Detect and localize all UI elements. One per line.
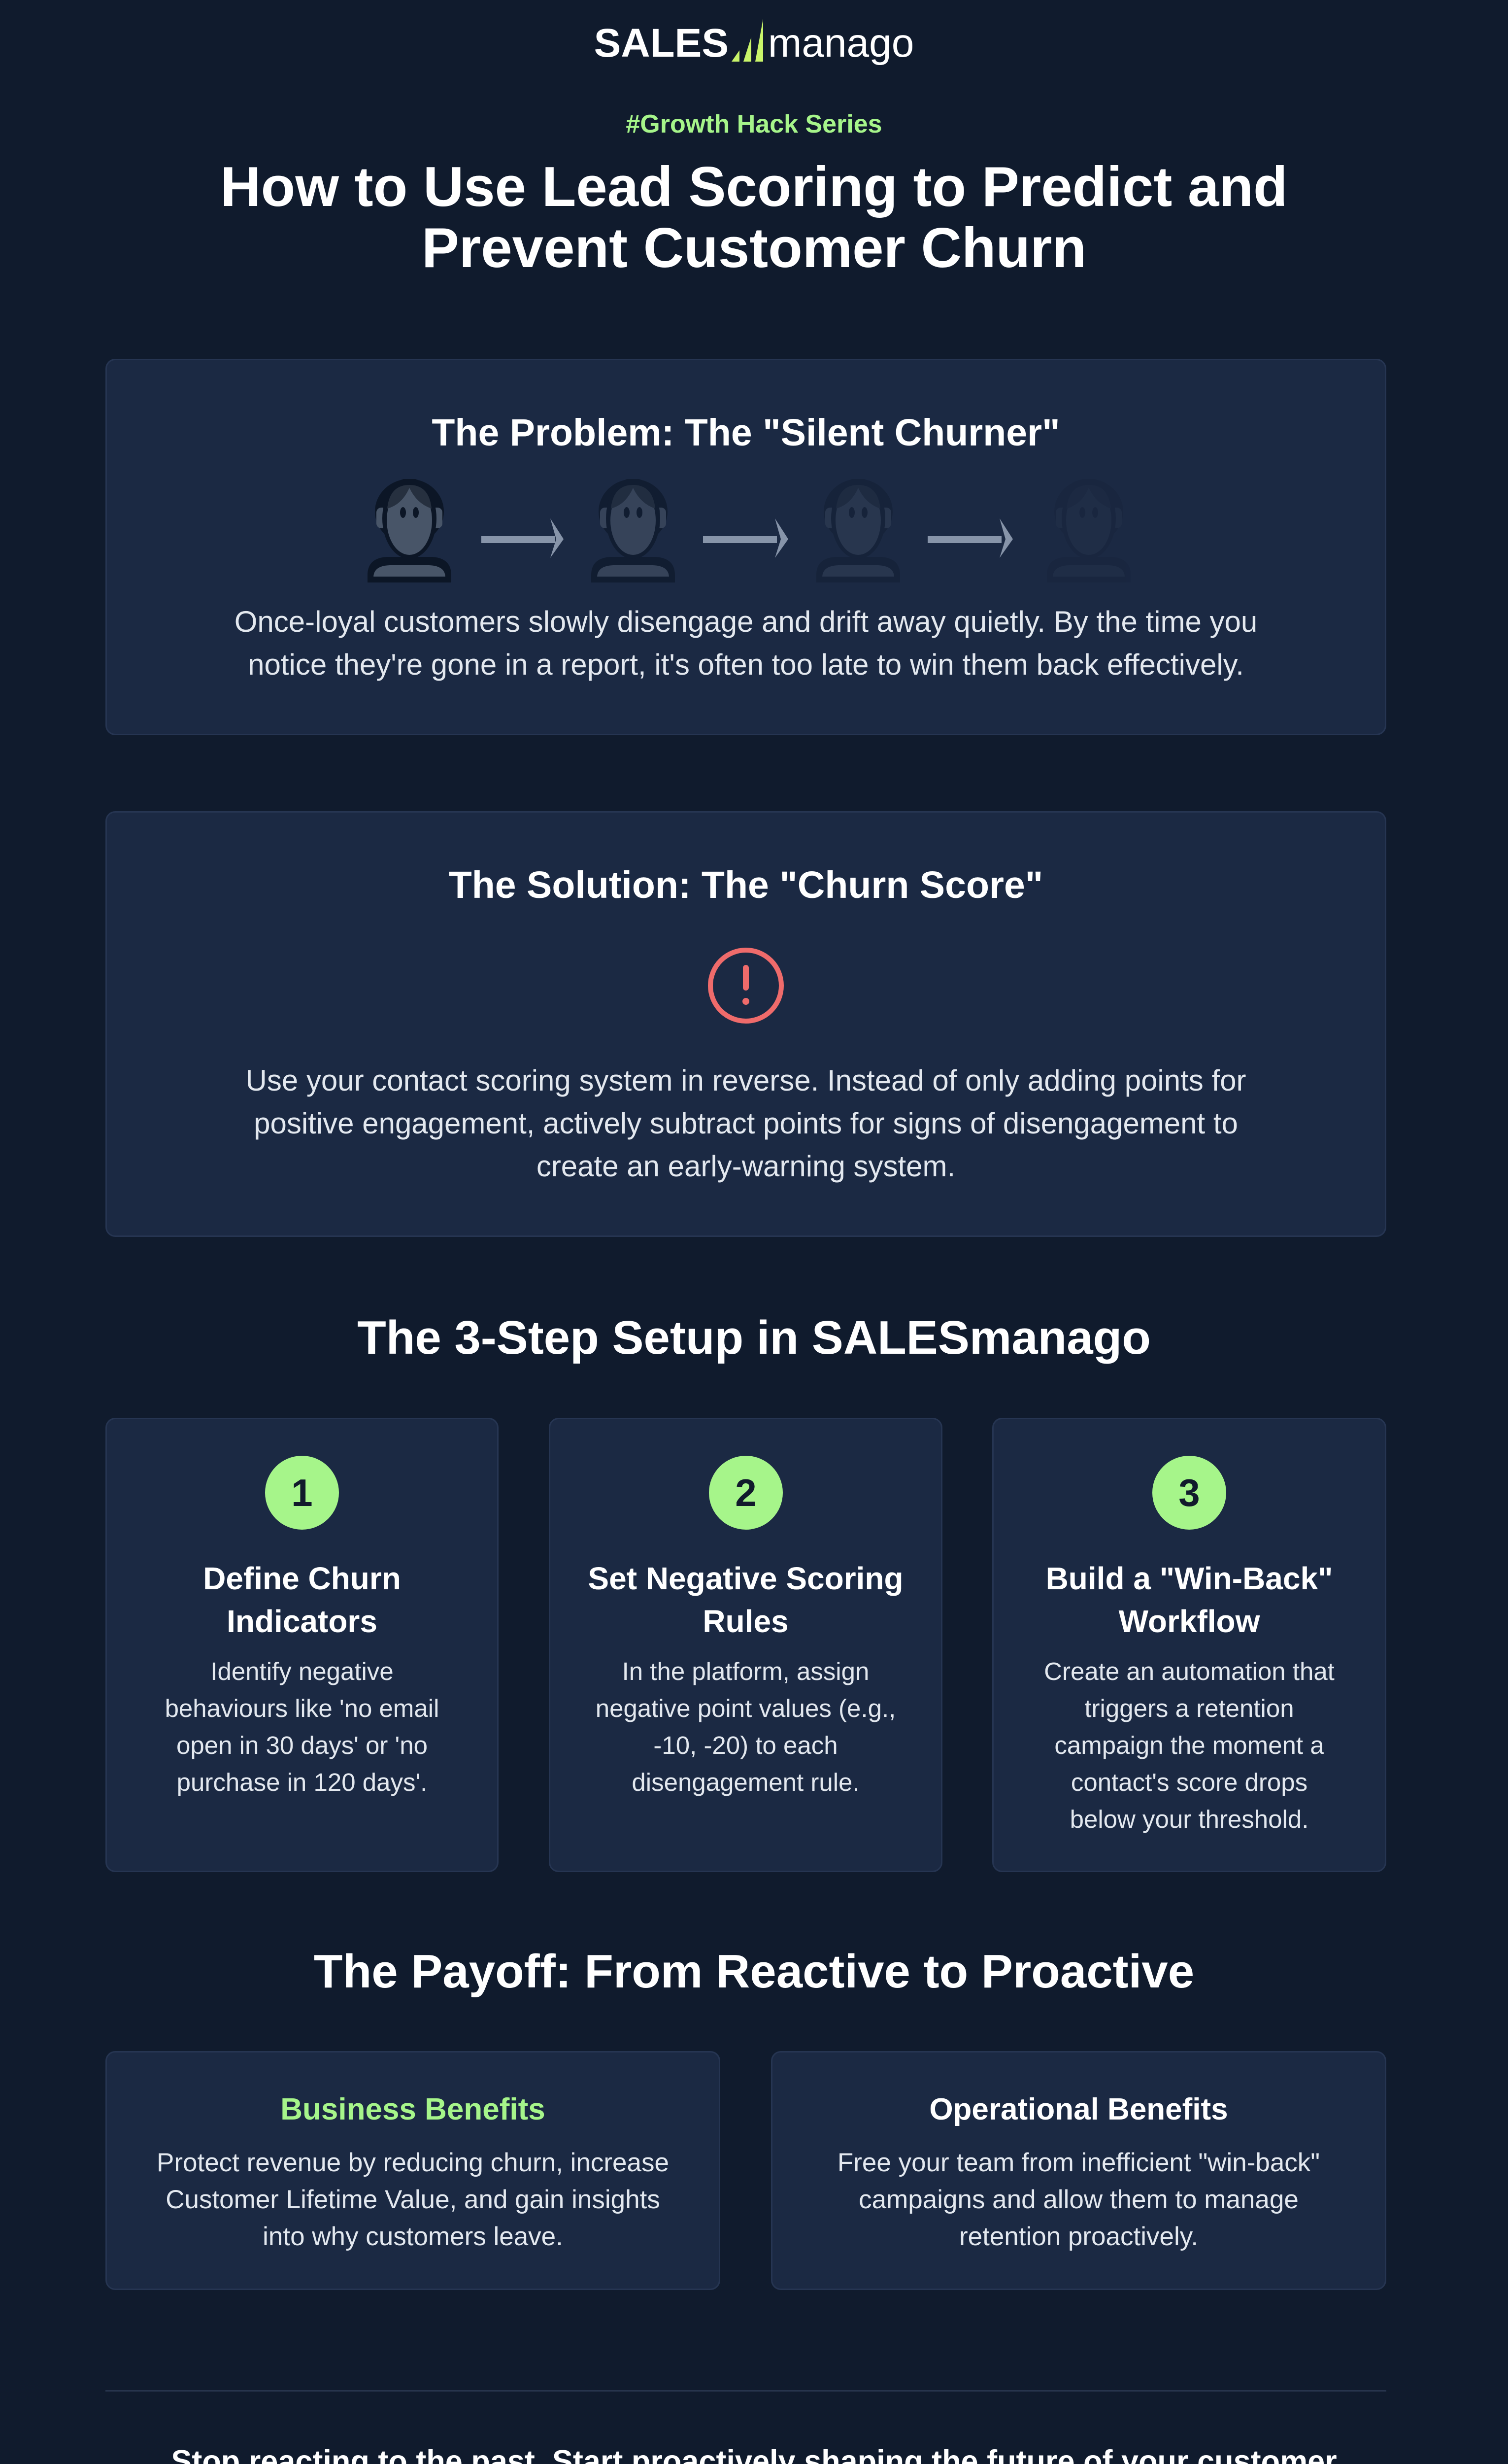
step 3 text: triggers a retention — [1084, 1694, 1294, 1722]
operational text: Free your team from inefficient "win-back" — [838, 2148, 1320, 2177]
icon row: fading customers — [368, 479, 1013, 582]
step 2 text: -10, -20) to each — [653, 1731, 838, 1759]
text: solution: Use your contact scoring system in reverse. Instead of only adding points for — [245, 1064, 1246, 1097]
business heading: Business Benefits — [280, 2092, 545, 2126]
business text: Customer Lifetime Value, and gain insights — [166, 2185, 660, 2214]
step 1 title: Indicators — [227, 1604, 377, 1639]
text: solution: create an early-warning system. — [536, 1150, 955, 1183]
step 3 title — [1046, 1561, 1333, 1639]
step 3 text: contact's score drops — [1071, 1768, 1307, 1796]
step 3 text: Create an automation that — [1044, 1657, 1335, 1685]
step 3 title: Build a "Win-Back" — [1046, 1561, 1333, 1596]
title: Prevent Customer Churn — [422, 217, 1086, 279]
step 2 text: In the platform, assign — [622, 1657, 869, 1685]
heading: 3-step setup: The 3-Step Setup in SALESmanago — [357, 1311, 1151, 1364]
badge 3: 3 — [1178, 1471, 1200, 1514]
operational text: campaigns and allow them to manage — [859, 2185, 1299, 2214]
business text — [157, 2148, 669, 2251]
business text: Protect revenue by reducing churn, increase — [157, 2148, 669, 2177]
card: step 2 — [549, 1418, 942, 1872]
step 1 text: open in 30 days' or 'no — [176, 1731, 428, 1759]
panel: problem — [105, 359, 1386, 735]
operational text — [838, 2148, 1320, 2251]
operational text: retention proactively. — [959, 2222, 1198, 2251]
step 1 text: Identify negative — [210, 1657, 394, 1685]
step 1 text: purchase in 120 days'. — [177, 1768, 427, 1796]
text: problem: notice they're gone in a report, it's often too late to win them back effectively. — [248, 648, 1244, 681]
badge 1 — [265, 1456, 339, 1530]
card: business benefits — [105, 2051, 720, 2290]
text: problem: Once-loyal customers slowly disengage and drift away quietly. By the time you — [235, 605, 1257, 638]
step 2 text: disengagement rule. — [632, 1768, 860, 1796]
business text: into why customers leave. — [263, 2222, 563, 2251]
badge 3 — [1152, 1456, 1226, 1530]
step 1 title: Define Churn — [203, 1561, 401, 1596]
card: step 3 — [992, 1418, 1386, 1872]
step 1 title — [203, 1561, 401, 1639]
badge 1: 1 — [291, 1471, 313, 1514]
text: solution — [245, 1064, 1246, 1183]
step 2 title — [588, 1561, 904, 1639]
title — [220, 156, 1288, 279]
text: solution: positive engagement, actively subtract points for signs of disengagement to — [254, 1107, 1238, 1140]
step 2 text — [596, 1657, 896, 1796]
heading: solution: The Solution: The "Churn Score" — [449, 864, 1043, 906]
step 3 title: Workflow — [1119, 1604, 1260, 1639]
series tag: #Growth Hack Series — [626, 110, 882, 138]
step 3 text: campaign the moment a — [1054, 1731, 1324, 1759]
title: How to Use Lead Scoring to Predict and — [220, 156, 1288, 218]
badge 2 — [709, 1456, 783, 1530]
step 1 text: behaviours like 'no email — [165, 1694, 439, 1722]
step 2 title: Set Negative Scoring — [588, 1561, 904, 1596]
step 3 text: below your threshold. — [1070, 1805, 1308, 1833]
icon: warning — [708, 948, 784, 1024]
heading: problem: The Problem: The "Silent Churner" — [432, 411, 1060, 454]
heading: payoff: The Payoff: From Reactive to Proactive — [314, 1945, 1194, 1998]
text: problem — [235, 605, 1257, 681]
card: operational benefits — [771, 2051, 1386, 2290]
logo: SALES manago — [594, 21, 914, 66]
badge 2: 2 — [735, 1471, 757, 1514]
step 3 text — [1044, 1657, 1335, 1833]
step 1 text — [165, 1657, 439, 1796]
operational heading: Operational Benefits — [929, 2092, 1228, 2126]
panel: solution — [105, 811, 1386, 1237]
step 2 title: Rules — [703, 1604, 789, 1639]
card: step 1 — [105, 1418, 499, 1872]
step 2 text: negative point values (e.g., — [596, 1694, 896, 1722]
